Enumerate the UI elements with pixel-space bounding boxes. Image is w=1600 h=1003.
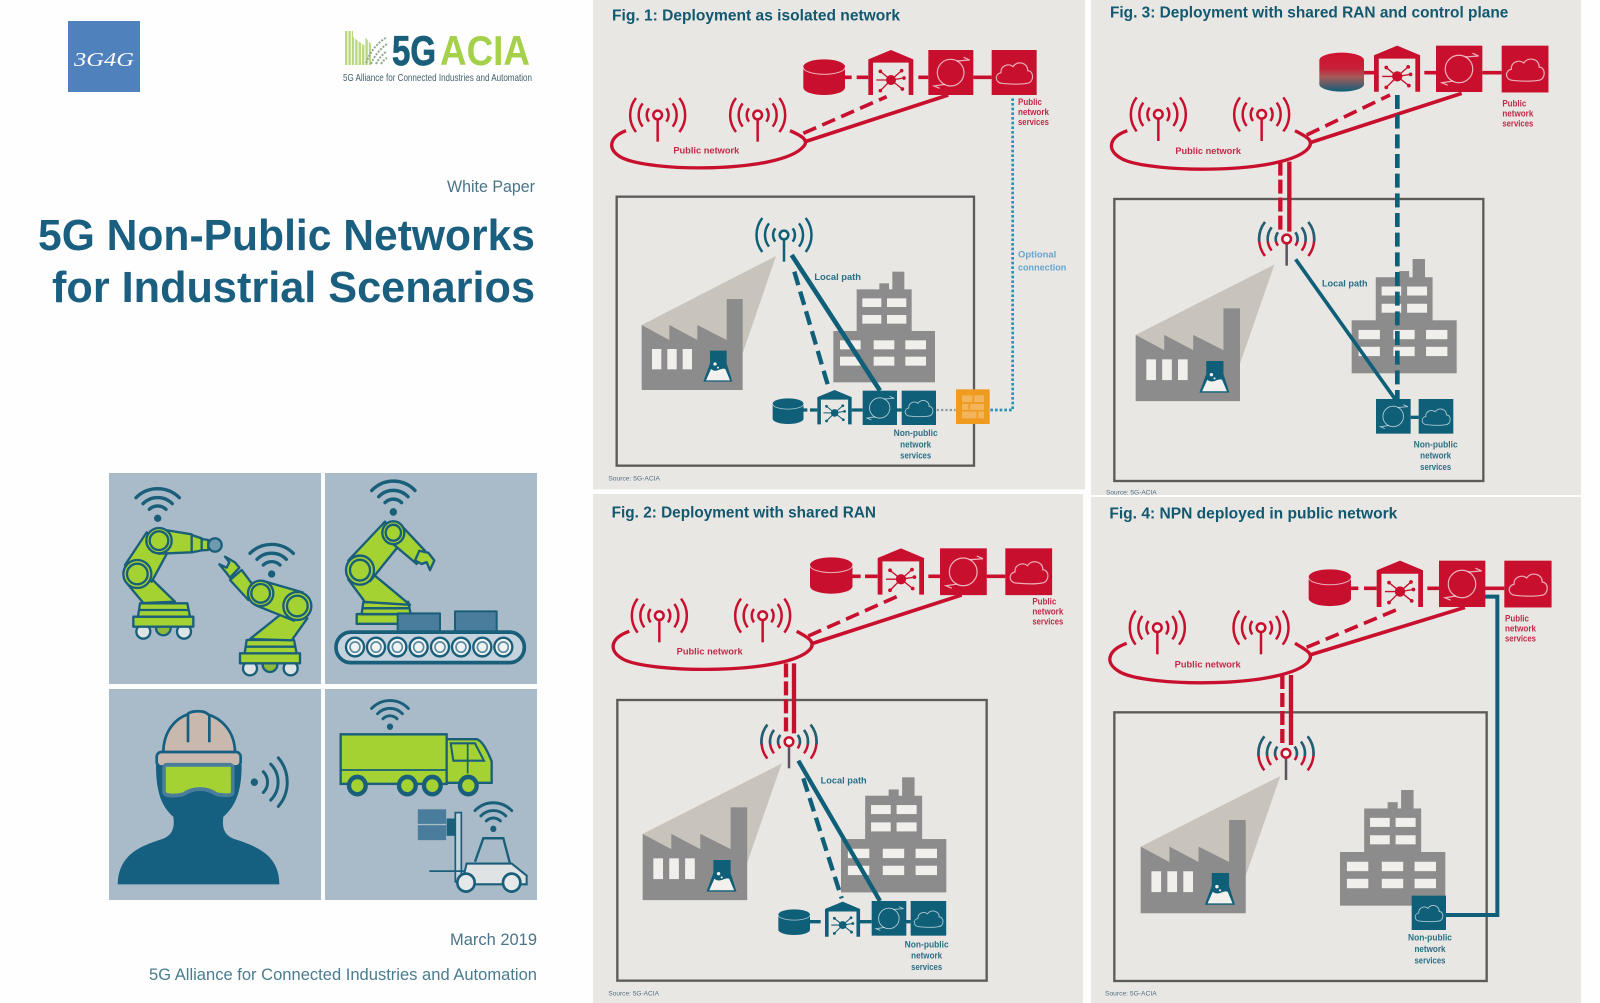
non-public network: Non-public (1408, 933, 1452, 943)
title: for Industrial Scenarios (52, 263, 535, 312)
non-public network: Non-public (1414, 439, 1458, 449)
optional connection dotted link: connection (1018, 263, 1066, 273)
panel: Fig. 4 (1091, 497, 1581, 1003)
icon: firewall (956, 389, 990, 424)
logo: 5G ACIA (343, 27, 532, 84)
source note: Source: 5G-ACIA (608, 476, 661, 483)
logo: 3G4G: 3G4G (73, 49, 135, 71)
panel: Fig. 1 (593, 0, 1085, 489)
non-public network: network (900, 439, 931, 449)
non-public network: services (900, 451, 931, 461)
source note: Source: 5G-ACIA (608, 990, 660, 997)
backhaul links (786, 663, 794, 733)
icon grid: industrial scenarios (109, 473, 537, 900)
title: 5G Non-Public Networks (38, 211, 535, 260)
public network: Public (1018, 97, 1042, 107)
public network: Public (1505, 614, 1529, 624)
public network (613, 548, 1063, 669)
public network: Public network (1175, 660, 1241, 670)
panel: white paper cover (38, 21, 537, 984)
shared antenna (761, 725, 817, 768)
non-public network: network (911, 951, 942, 961)
public network: network (1505, 624, 1536, 634)
shared antenna (1259, 222, 1314, 266)
office building (1340, 790, 1445, 906)
factory with light beam (642, 256, 776, 390)
public network: network (1018, 107, 1049, 117)
panel: Fig. 3 (1091, 0, 1581, 496)
public network: Public (1502, 99, 1526, 109)
public network: services (1018, 117, 1049, 127)
shared antenna (1258, 736, 1314, 780)
heading: Fig. 1: Fig. 1: Deployment as isolated network (612, 8, 900, 25)
non-public network: Non-public (894, 428, 938, 438)
public network: services (1032, 616, 1063, 626)
public network (1110, 561, 1552, 683)
logo: 5G ACIA: 5G Alliance for Connected Industries and Automation (343, 72, 532, 84)
public network: services (1502, 119, 1533, 129)
tile: worker with VR goggles (109, 689, 321, 900)
title (38, 211, 535, 312)
heading: Fig. 3: Fig. 3: Deployment with shared RAN and control plane (1110, 5, 1509, 22)
panel: Fig. 2 (593, 494, 1083, 1003)
label: White Paper: White Paper (447, 177, 535, 196)
date: March 2019: March 2019 (450, 930, 537, 949)
factory with light beam (1136, 264, 1274, 401)
non-public network (1408, 597, 1497, 965)
source note: Source: 5G-ACIA (1105, 990, 1157, 997)
non-public network: Non-public (905, 939, 949, 949)
non-public network: services (911, 962, 942, 972)
non-public network: network (1414, 944, 1445, 954)
public network: Public network (673, 145, 739, 155)
publisher line: 5G Alliance for Connected Industries and Automation (149, 965, 537, 984)
non-public network: Local path (1322, 279, 1368, 289)
site boundary (617, 700, 987, 981)
public network: Public network (677, 647, 743, 657)
non-public network (778, 761, 949, 972)
public network: Public network (1175, 146, 1241, 156)
source note: Source: 5G-ACIA (1106, 489, 1157, 496)
office building (833, 272, 935, 382)
site boundary (617, 197, 974, 466)
backhaul links (1280, 162, 1289, 232)
site boundary (1114, 712, 1487, 981)
non-public network: services (1414, 955, 1445, 965)
non-public network (756, 218, 938, 461)
non-public network: services (1420, 462, 1451, 472)
non-public network: network (1420, 451, 1451, 461)
office building (841, 777, 946, 892)
public network: Public (1032, 596, 1056, 606)
non-public network: Local path (821, 775, 867, 785)
gray dotted link to firewall (937, 406, 956, 413)
site boundary (1114, 199, 1483, 481)
public network (1111, 46, 1548, 169)
logo: 5G ACIA: 5G (392, 27, 436, 74)
office building (1352, 259, 1457, 373)
public network (612, 50, 1049, 168)
heading: Fig. 2: Fig. 2: Deployment with shared RAN (612, 505, 876, 522)
factory with light beam (643, 763, 782, 900)
non-public network (1296, 95, 1458, 472)
optional connection dotted link (990, 98, 1066, 410)
optional connection dotted link: Optional (1018, 249, 1056, 259)
logo: 3G4G (68, 21, 140, 92)
tile: robot over conveyor belt (325, 473, 537, 684)
non-public network: Local path (814, 272, 861, 282)
heading: Fig. 4: Fig. 4: NPN deployed in public network (1109, 505, 1398, 522)
public network: network (1032, 606, 1063, 616)
public network: network (1502, 109, 1533, 119)
factory with light beam (1141, 776, 1280, 913)
backhaul links (1282, 675, 1291, 745)
tile: collaborating robot arms (109, 473, 321, 684)
public network: services (1505, 634, 1536, 644)
tile: truck and forklift (325, 689, 537, 900)
logo: 5G ACIA: ACIA (440, 27, 530, 74)
